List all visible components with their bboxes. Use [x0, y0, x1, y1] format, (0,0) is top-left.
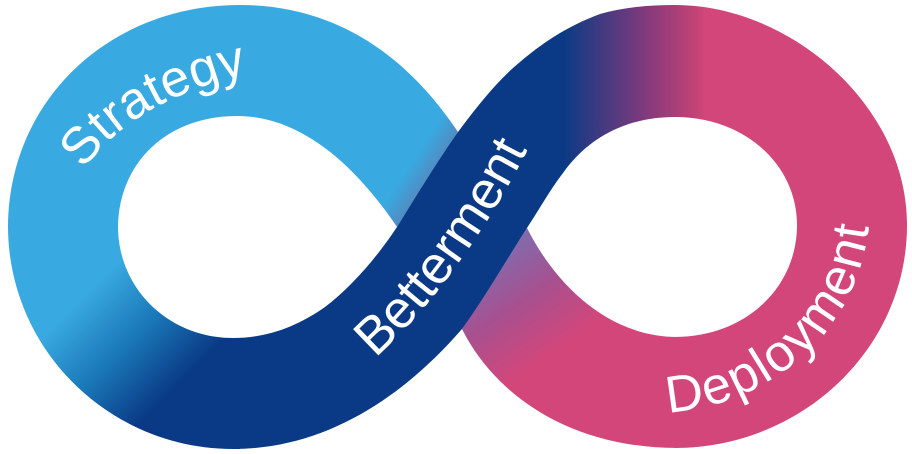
right lobe upper band [670, 5, 907, 225]
label: Betterment: Betterment [353, 138, 528, 356]
label: Strategy: Strategy [62, 48, 241, 164]
left lobe upper band [8, 5, 458, 228]
label: Deployment: Deployment [667, 224, 869, 412]
lower crossing purple to pink band [462, 228, 678, 448]
central navy ribbon [233, 5, 675, 449]
right lobe lower band [675, 224, 907, 448]
left lobe lower band [8, 226, 240, 449]
